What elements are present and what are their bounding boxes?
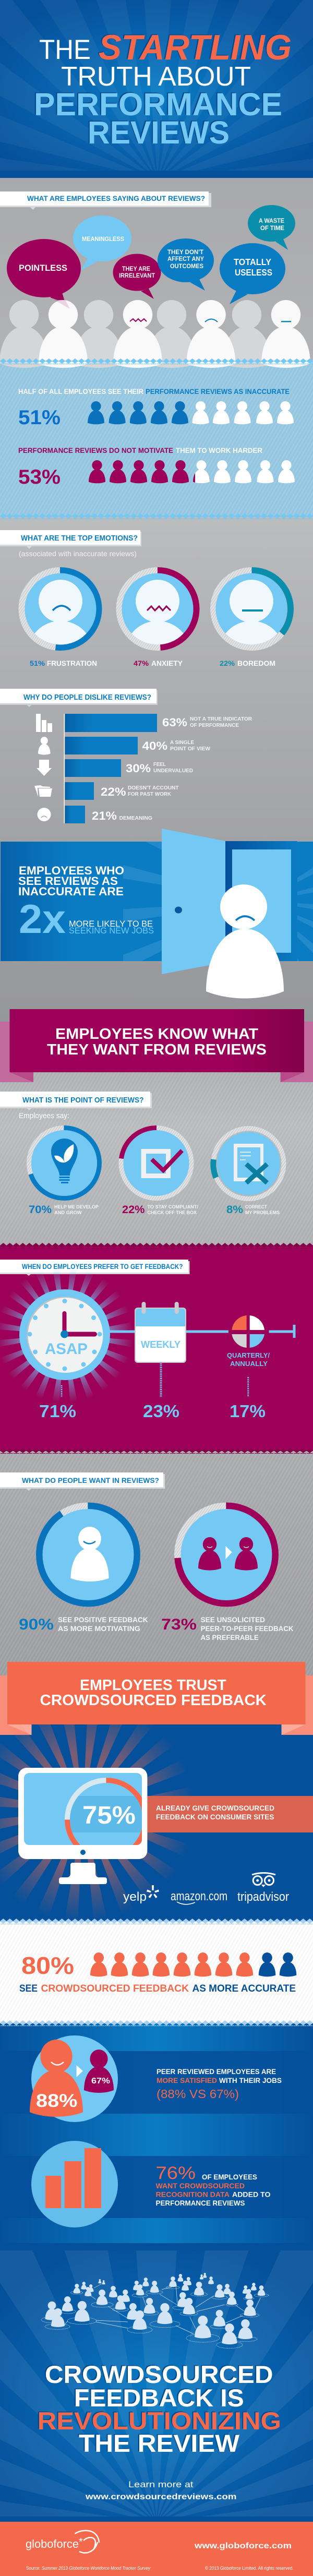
panel: 2x more likely to seek new jobs (1, 829, 313, 999)
logo: amazon: amazon.com (171, 1889, 227, 1903)
closing headline: REVOLUTIONIZING (38, 2407, 281, 2435)
ribbon: employees know what they want: THEY WANT FROM REVIEWS (47, 1041, 267, 1058)
donut: 90% positive feedback: AS MORE MOTIVATING (58, 1624, 140, 1633)
panel text: SEEKING NEW JOBS (69, 926, 154, 936)
text: 76% want recognition data (155, 2163, 271, 2207)
logo: tripadvisor: tripadvisor (237, 1890, 289, 1904)
callout band: already give crowdsourced feedback: ALREADY GIVE CROWDSOURCED (156, 1804, 274, 1812)
donut: 90% positive feedback: 90% (19, 1616, 54, 1633)
zigzag edge (0, 1243, 313, 1249)
zigzag edge (0, 2020, 313, 2026)
text: 76% want recognition data: 76% (155, 2163, 196, 2183)
stat: 51% inaccurate: HALF OF ALL EMPLOYEES SEE THEIR (18, 387, 143, 396)
panel text: SEE REVIEWS AS (18, 874, 118, 888)
ribbon: employees trust crowdsourced feedback (0, 1662, 313, 1735)
bar: 63%: NOT A TRUE INDICATOR (190, 716, 252, 722)
donut: 70% develop and grow: 70% (29, 1204, 52, 1216)
timeline stat values: 17% (230, 1401, 266, 1421)
donut: 22% stay compliant (121, 1128, 198, 1216)
heading tag: when feedback (0, 1260, 190, 1276)
speech bubble: irrelevant: IRRELEVANT (119, 272, 155, 279)
logo: yelp: yelp (123, 1890, 147, 1904)
network of connected people (41, 2273, 269, 2349)
clock: ASAP: ASAP (45, 1340, 88, 1358)
bar: 21%: DEMEANING (119, 816, 152, 821)
closing headline: CROWDSOURCED (45, 2361, 273, 2388)
heading tag: why dislike: WHY DO PEOPLE DISLIKE REVIEWS? (23, 693, 151, 702)
text: peer reviewed employees more satisfied: (88% VS 67%) (156, 2087, 239, 2101)
panel text: 2x (19, 896, 66, 942)
emotion: frustration (22, 570, 99, 684)
heading tag: when feedback: WHEN DO EMPLOYEES PREFER TO GET FEEDBACK? (22, 1262, 183, 1271)
icon: rising bar chart (31, 2141, 118, 2227)
text: 76% want recognition data: WANT CROWDSOURCED (155, 2182, 245, 2190)
door and unhappy person (162, 829, 297, 999)
speech bubble: no outcomes (158, 238, 214, 291)
copyright: © 2013 Globoforce Limited. All rights reserved. (205, 2566, 293, 2571)
timeline stat values: 23% (143, 1401, 179, 1421)
stat: 51% inaccurate: 51% (18, 406, 61, 429)
title (34, 28, 292, 150)
text: peer reviewed employees more satisfied (156, 2067, 282, 2101)
source note: Source: Summer 2013 Globoforce Workforce Mood Tracker Survey (26, 2566, 150, 2571)
bar: 40%: 40% (142, 739, 167, 752)
donut: 8% correct problems: MY PROBLEMS (245, 1210, 280, 1216)
donut: 70% develop and grow: AND GROW (54, 1210, 82, 1216)
panel text: MORE LIKELY TO BE (69, 919, 153, 929)
bar: 30% (37, 759, 193, 777)
heading tag: top emotions: WHAT ARE THE TOP EMOTIONS? (21, 534, 138, 543)
timeline stat values: 71% (39, 1401, 76, 1421)
icon: lightbulb with leaves (51, 1139, 78, 1183)
bar: 22% (34, 782, 178, 800)
ribbon: employees know what they want (0, 1009, 313, 1082)
speech bubble: meaningless (73, 215, 131, 270)
ribbon: employees trust crowdsourced feedback: CROWDSOURCED FEEDBACK (40, 1692, 267, 1709)
speech bubble: pointless: POINTLESS (19, 263, 67, 273)
ribbon: employees know what they want: EMPLOYEES KNOW WHAT (55, 1026, 258, 1043)
stat: 53% not motivated (19, 448, 295, 484)
clock: ASAP (0, 1264, 135, 1405)
title: PERFORMANCE (34, 87, 282, 122)
bar: 40% (38, 737, 211, 755)
stat: 53% not motivated: THEM TO WORK HARDER (176, 446, 262, 454)
heading tag: what people want (0, 1472, 165, 1491)
subheading: associated with inaccurate reviews: (associated with inaccurate reviews) (19, 549, 137, 558)
donut: 73% peer-to-peer: AS PREFERABLE (201, 1633, 259, 1642)
text: 76% want recognition data: ADDED TO (232, 2190, 271, 2199)
donut: 90% positive feedback (19, 1506, 148, 1633)
panel text: EMPLOYEES WHO (19, 864, 124, 877)
icon: peer reviewed employees 88% vs 67%: 67% (91, 2077, 110, 2086)
title: THE (39, 34, 91, 65)
bar: 30%: 30% (126, 762, 151, 775)
bar: 22%: FOR PAST WORK (128, 792, 172, 797)
donut: 73% peer-to-peer: SEE UNSOLICITED (201, 1615, 265, 1624)
bar: 22%: 22% (101, 785, 126, 798)
panel text (18, 864, 154, 942)
heading tag: top emotions (0, 530, 141, 549)
zigzag edge (0, 1448, 313, 1454)
emotion: frustration: 51% (30, 659, 45, 667)
speech bubble: irrelevant: THEY ARE (122, 265, 150, 272)
speech bubble: totally useless: USELESS (235, 267, 272, 278)
title: REVIEWS (88, 115, 230, 150)
quarterly pie (227, 1315, 270, 1368)
ribbon: employees trust crowdsourced feedback: EMPLOYEES TRUST (80, 1677, 226, 1694)
bar: 40%: POINT OF VIEW (170, 746, 211, 752)
bar chart: dislike reasons (34, 714, 252, 823)
footer (0, 2517, 313, 2576)
speech bubble: totally useless (220, 243, 285, 304)
logo: globoforce: * (79, 2536, 83, 2548)
donut: 70% develop and grow: HELP ME DEVELOP (54, 1204, 99, 1210)
heading tag: what are employees saying (0, 191, 211, 210)
bar: 63% (36, 714, 252, 732)
speech bubble: meaningless: MEANINGLESS (82, 236, 124, 243)
quarterly pie: QUARTERLY/ (227, 1351, 270, 1359)
bar: 21%: 21% (92, 809, 117, 822)
speech bubble: no outcomes: AFFECT ANY (167, 255, 204, 262)
stat: 80% crowdsourced more accurate: 80% (21, 1952, 74, 1979)
monitor rays (0, 1696, 198, 1925)
icon: peer reviewed employees 88% vs 67% (30, 2035, 118, 2122)
learn more link: Learn more at (128, 2479, 194, 2489)
donut: 8% correct problems: CORRECT (245, 1204, 267, 1210)
header sunburst (0, 0, 313, 178)
text: peer reviewed employees more satisfied: WITH THEIR JOBS (219, 2076, 282, 2084)
title: STARTLING (99, 28, 292, 67)
learn more link (85, 2479, 237, 2501)
crowd of people (0, 300, 310, 368)
donut: 90% positive feedback: SEE POSITIVE FEEDBACK (58, 1615, 148, 1624)
panel text: INACCURATE ARE (18, 885, 124, 898)
speech bubble: no outcomes: OUTCOMES (170, 262, 203, 270)
bar: 30%: UNDERVALUED (153, 768, 193, 774)
subheading: employees say: Employees say: (19, 1111, 69, 1120)
donut: 8% correct problems (213, 1128, 284, 1216)
calendar: weekly (135, 1302, 186, 1363)
donut: 22% stay compliant: CHECK OFF THE BOX (147, 1210, 197, 1216)
donut: 22% stay compliant: 22% (122, 1204, 145, 1216)
emotion: anxiety: 47% (134, 659, 149, 667)
speech bubble: totally useless: TOTALLY (234, 257, 271, 267)
bar: 63%: OF PERFORMANCE (190, 723, 239, 728)
stat: 51% inaccurate: PERFORMANCE REVIEWS AS INACCURATE (146, 387, 290, 396)
closing headline: FEEDBACK IS (74, 2384, 244, 2412)
stat: 53% not motivated: PERFORMANCE REVIEWS DO NOT MOTIVATE (18, 446, 173, 454)
donut: 73% peer-to-peer (161, 1506, 294, 1642)
zigzag edge (0, 1919, 313, 1924)
closing headline: THE REVIEW (79, 2429, 240, 2457)
stat: 53% not motivated: 53% (18, 466, 61, 488)
emotion: boredom (213, 570, 291, 684)
footer: www.globoforce.com (194, 2542, 292, 2550)
calendar: weekly: WEEKLY (141, 1339, 181, 1350)
learn more link: www.crowdsourcedreviews.com (85, 2493, 237, 2501)
text: 76% want recognition data: RECOGNITION DATA (155, 2190, 230, 2199)
text: peer reviewed employees more satisfied: PEER REVIEWED EMPLOYEES ARE (156, 2067, 276, 2076)
bar: 30%: FEEL (153, 762, 166, 768)
heading tag: point of reviews (0, 1092, 152, 1110)
logo: globoforce: globoforce (26, 2537, 79, 2550)
quarterly pie: ANNUALLY (230, 1360, 268, 1368)
speech bubble: waste of time (248, 205, 295, 250)
donut: 73% peer-to-peer: 73% (161, 1616, 197, 1633)
timeline axis (107, 1325, 295, 1338)
speech bubble: pointless (7, 239, 81, 309)
heading tag: why dislike (0, 689, 158, 707)
stat: 80% crowdsourced more accurate: SEE (19, 1983, 38, 1994)
logo: yelp (123, 1885, 159, 1904)
closing sunburst (0, 2250, 313, 2517)
heading tag: what are employees saying: WHAT ARE EMPLOYEES SAYING ABOUT REVIEWS? (27, 194, 205, 202)
monitor with 75% donut (18, 1768, 147, 1884)
emotion: frustration: FRUSTRATION (47, 659, 97, 667)
bar: 22%: DOESN'T ACCOUNT (128, 785, 178, 791)
callout band: already give crowdsourced feedback: FEEDBACK ON CONSUMER SITES (156, 1813, 274, 1821)
text: 76% want recognition data: OF EMPLOYEES (202, 2173, 257, 2181)
logo: globoforce (26, 2531, 99, 2553)
icon: document with cross (234, 1144, 267, 1183)
emotion: anxiety (119, 570, 196, 684)
bar: 21% (38, 806, 152, 823)
speech bubble: waste of time: OF TIME (260, 224, 284, 232)
donut: 73% peer-to-peer: PEER-TO-PEER FEEDBACK (201, 1624, 294, 1633)
stat: 51% inaccurate (18, 387, 294, 429)
emotion: boredom: BOREDOM (237, 659, 275, 667)
stat: 80% crowdsourced more accurate: CROWDSOURCED FEEDBACK (41, 1983, 189, 1994)
donut: 8% correct problems: 8% (226, 1204, 243, 1216)
icon: peer reviewed employees 88% vs 67%: 88% (36, 2091, 77, 2111)
bar: 40%: A SINGLE (170, 740, 194, 746)
text: 76% want recognition data: PERFORMANCE REVIEWS (155, 2199, 245, 2207)
speech bubble: waste of time: A WASTE (259, 217, 284, 224)
donut: 70% develop and grow (29, 1128, 99, 1216)
donut: 22% stay compliant: TO STAY COMPLIANT/ (147, 1204, 198, 1210)
speech bubble: irrelevant (113, 254, 161, 299)
title: TRUTH ABOUT (61, 62, 251, 92)
stat: 80% crowdsourced more accurate (19, 1952, 296, 1994)
emotion: anxiety: ANXIETY (151, 659, 183, 667)
zigzag edge (0, 513, 313, 519)
callout band: already give crowdsourced feedback (147, 1796, 313, 1832)
zigzag edge (0, 358, 313, 364)
monitor with 75% donut: 75% (82, 1802, 136, 1829)
speech bubble: no outcomes: THEY DON'T (167, 248, 204, 256)
emotion: boredom: 22% (220, 659, 235, 667)
heading tag: point of reviews: WHAT IS THE POINT OF REVIEWS? (22, 1096, 144, 1105)
logo: tripadvisor (237, 1873, 289, 1904)
heading tag: what people want: WHAT DO PEOPLE WANT IN REVIEWS? (22, 1476, 159, 1484)
timeline stat values (39, 1363, 266, 1421)
icon: checkbox (141, 1149, 182, 1178)
text: peer reviewed employees more satisfied: MORE SATISFIED (156, 2076, 217, 2084)
stat: 80% crowdsourced more accurate: AS MORE ACCURATE (192, 1983, 296, 1994)
bar: 63%: 63% (162, 716, 187, 729)
closing headline (38, 2361, 281, 2457)
